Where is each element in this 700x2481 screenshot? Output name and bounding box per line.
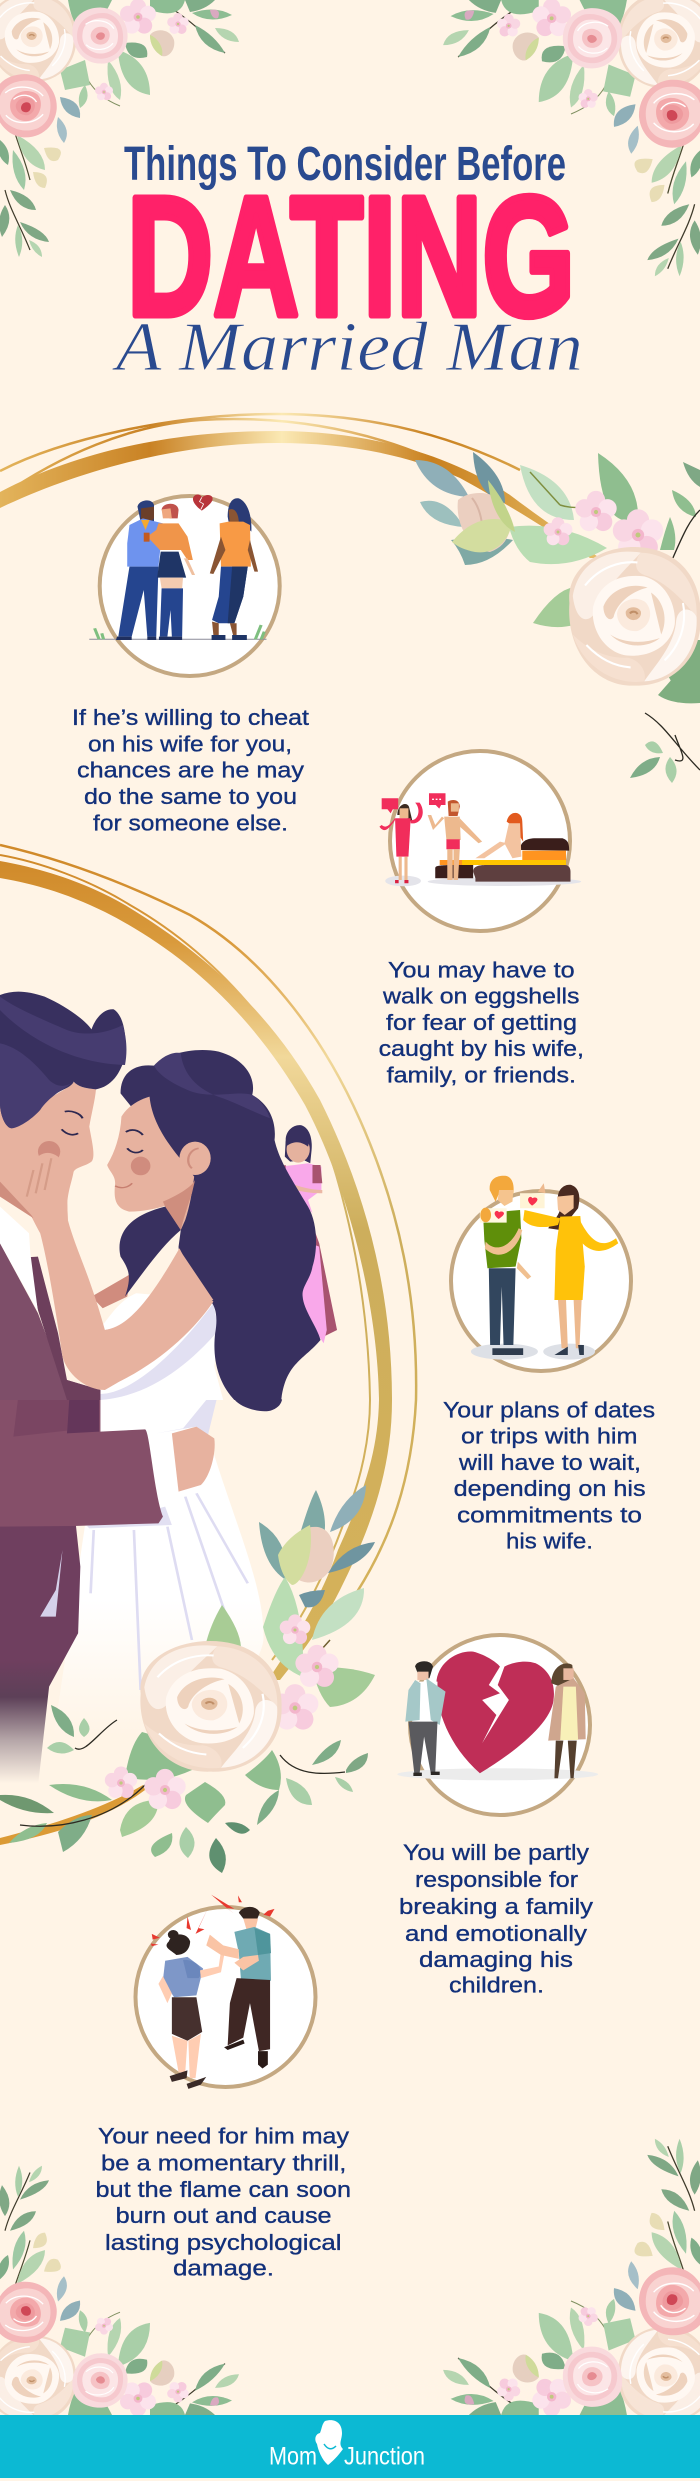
text 4: breaking a family (399, 1894, 594, 1919)
text 3: depending on his (454, 1476, 646, 1501)
floral corner: top right (443, 0, 700, 276)
logo wordmark part 2: Junction (344, 2442, 425, 2470)
cuff (152, 1433, 179, 1520)
man's hand (172, 1427, 215, 1492)
text 1: do the same to you (84, 784, 297, 809)
title line 3: A Married Man (112, 309, 583, 386)
logo wordmark: Mom (269, 2442, 317, 2470)
text 5: lasting psychological (105, 2230, 342, 2255)
text 5: but the flame can soon (96, 2177, 351, 2202)
text 3: his wife. (506, 1529, 593, 1554)
man's shirt (0, 1207, 38, 1312)
floral corner: bottom left (0, 2166, 239, 2422)
text 2: caught by his wife, (379, 1036, 584, 1061)
circle 1 (100, 496, 280, 676)
text 1: chances are he may (77, 758, 305, 783)
illustration: couple with love notes (471, 1176, 618, 1360)
text 1: If he’s willing to cheat (72, 705, 310, 730)
floral corner: top left (0, 0, 239, 257)
text 4: and emotionally (405, 1921, 588, 1946)
floral cluster: lower left (0, 1485, 375, 1873)
text 1 (72, 705, 310, 836)
text 3: Your plans of dates (443, 1397, 655, 1422)
title (112, 138, 583, 386)
woman's face (107, 1097, 194, 1230)
illustration: couple embracing, lower part (0, 1399, 282, 1787)
illustration: wife catching couple in bed (379, 793, 581, 886)
hair tips (234, 1399, 282, 1411)
text 3: or trips with him (461, 1423, 638, 1448)
text 5: burn out and cause (116, 2203, 332, 2228)
man's suit (0, 1243, 100, 1400)
floral cluster: top right (415, 452, 700, 783)
text 2: family, or friends. (387, 1063, 576, 1088)
illustration: couple arguing (151, 1895, 275, 2089)
text 4: You will be partly (403, 1840, 590, 1865)
illustration: man with two women (89, 495, 267, 640)
circle 3 (451, 1191, 631, 1371)
text 5: Your need for him may (98, 2124, 350, 2148)
text 3: commitments to (457, 1503, 642, 1528)
text 2: for fear of getting (386, 1010, 577, 1035)
text 3 (443, 1397, 655, 1554)
panel: point 3 (451, 1176, 631, 1371)
text 1: on his wife for you, (88, 732, 292, 757)
man's face (0, 1082, 96, 1220)
wedding skirt (54, 1400, 264, 1737)
panel: point 5 (136, 1895, 316, 2089)
illustration: other woman watching (278, 1125, 337, 1343)
circle 4 (410, 1635, 590, 1815)
text 3: will have to wait, (458, 1450, 641, 1475)
text 2 (379, 957, 584, 1088)
trousers (0, 1525, 80, 1787)
text 4: responsible for (415, 1867, 579, 1892)
man's arm behind (92, 1273, 132, 1308)
panel: point 4 (397, 1635, 598, 1815)
dress edge (156, 1400, 217, 1437)
panel: point 1 (89, 495, 280, 676)
man's hair (0, 992, 126, 1128)
text 5 (96, 2124, 351, 2280)
circle 2 (390, 751, 570, 931)
panel: point 2 (379, 751, 581, 931)
text 4 (399, 1840, 594, 1998)
footer bar (0, 2415, 700, 2481)
circle 5 (136, 1907, 316, 2087)
dress folds (91, 1493, 248, 1690)
logo icon (315, 2420, 343, 2465)
floral corner: bottom right (443, 2139, 700, 2423)
gold ring: top (0, 414, 600, 558)
text 5: damage. (173, 2255, 274, 2280)
illustration: couple embracing, upper part (0, 992, 321, 1400)
text 4: children. (449, 1973, 544, 1998)
gold ring: lower left (0, 845, 416, 1845)
woman's hand on cheek (20, 1153, 68, 1233)
text 1: for someone else. (93, 811, 288, 836)
dress shading (100, 1303, 219, 1400)
text 2: walk on eggshells (382, 983, 580, 1008)
text 4: damaging his (419, 1947, 573, 1972)
text 2: You may have to (388, 957, 575, 982)
illustration: broken heart and separated couple (397, 1651, 598, 1780)
text 5: be a momentary thrill, (101, 2150, 346, 2175)
wedding dress bodice (100, 1293, 223, 1400)
woman's shoulder and arm (20, 1153, 213, 1390)
man's sleeve (0, 1400, 163, 1527)
woman's hair (119, 1050, 321, 1400)
